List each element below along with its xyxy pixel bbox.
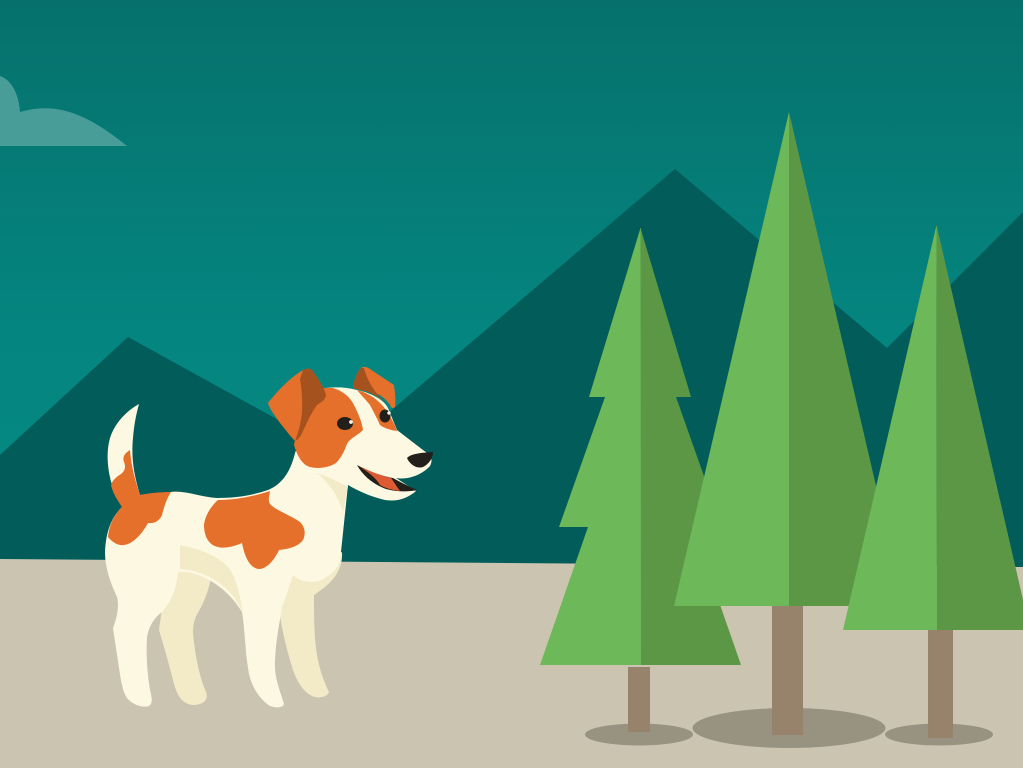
dog [105,367,433,707]
nose [407,452,433,468]
foliage: left tree light side [540,228,641,665]
foliage: right tree dark side [936,225,1023,630]
ear flap [353,367,395,408]
mouth [357,465,417,491]
tree: right [843,225,1023,746]
shadow: left tree [585,724,693,746]
neck shade [317,473,348,512]
tree: centre [674,112,904,748]
ground [0,559,1023,768]
haunch shade [180,545,243,613]
body patch: middle [204,491,305,569]
far front leg and chest shade [280,552,342,697]
tree: left [540,228,741,746]
cloud [0,76,127,146]
foliage: left tree dark side [640,228,741,665]
foliage: centre tree light side [674,112,789,606]
mouth interior [357,465,417,491]
trunk: right tree [928,628,953,738]
head patch [294,388,363,468]
trunk: left tree [628,667,650,732]
tongue [359,466,400,491]
sky background [0,0,1023,600]
foliage: right tree light side [843,225,937,630]
eye: left [337,417,353,430]
mountains [0,169,1023,580]
ear fold [295,369,326,441]
shadow: right tree [885,724,993,746]
ear: left [268,369,326,441]
far hind leg [159,570,212,705]
tail and body [105,387,432,707]
ear: right [353,367,397,431]
foliage: centre tree dark side [789,112,904,606]
trunk: centre tree [772,604,803,735]
ear fold [353,368,386,404]
ear flap [268,369,326,441]
eye: right [380,410,391,422]
eye patch [357,390,397,431]
shadow: centre tree [692,708,886,748]
body patch: rump and tail [108,450,171,545]
